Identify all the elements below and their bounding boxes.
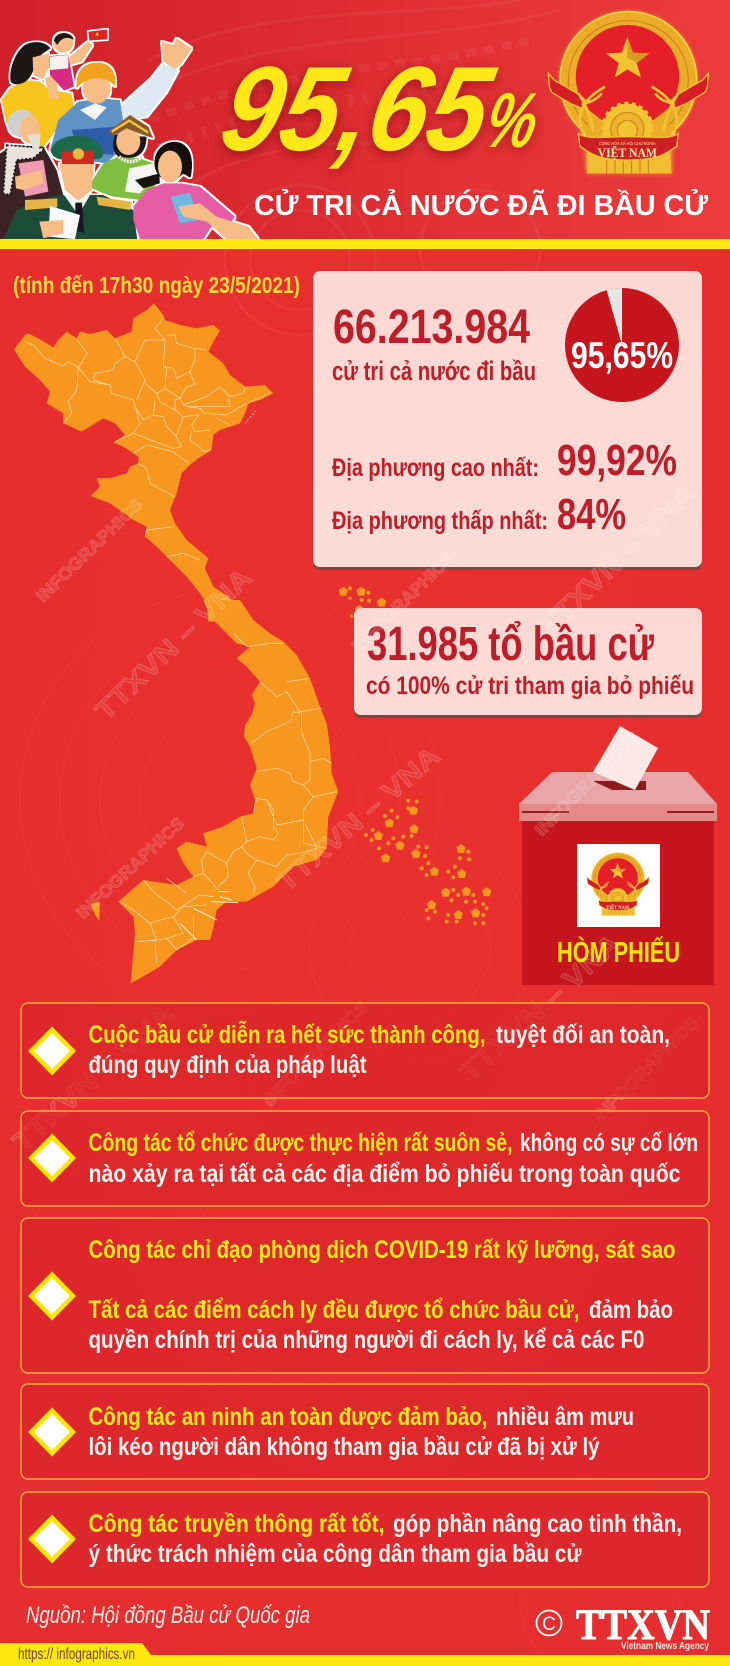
watermarks: TTXVN – VNA	[454, 928, 626, 1087]
panel: election success	[21, 1003, 709, 1098]
emblem on ballot box: VIỆT NAM	[606, 905, 629, 911]
icon: ballot box	[519, 726, 717, 985]
map of Vietnam	[14, 303, 491, 983]
worker with raised hand	[50, 38, 192, 163]
mother	[2, 42, 75, 148]
total voters label: cử tri cả nước đi bầu	[332, 356, 536, 386]
emblem: Vietnam national coat of arms	[548, 12, 708, 173]
statement text	[88, 1403, 634, 1461]
bottom band with website tab: https:// infographics.vn	[18, 1646, 135, 1663]
statement text: lôi kéo người dân không tham gia bầu cử đã bị xử lý	[88, 1433, 600, 1461]
lowest locality value: 84%	[557, 490, 626, 539]
header banner	[0, 0, 730, 335]
title percentage: 95,65	[211, 41, 505, 176]
statement text	[88, 1019, 670, 1079]
panel: communications	[21, 1492, 709, 1587]
copyright logo: TTXVN	[536, 1602, 710, 1652]
panel: organisation	[21, 1111, 709, 1206]
statement text: đảm bảo	[589, 1296, 673, 1324]
soldier	[3, 136, 137, 239]
icon: diamond bullet	[28, 1026, 76, 1076]
Hoang Sa islands	[339, 586, 386, 623]
child with flag	[45, 29, 107, 99]
emblem on ballot box	[587, 853, 649, 916]
island: Phu Quoc	[91, 902, 100, 921]
illustration: voters group	[0, 29, 258, 240]
copyright logo: TTXVN: C	[542, 1614, 556, 1635]
watermarks: INFOGRAPHICS	[259, 997, 372, 1110]
highest locality value: 99,92%	[557, 436, 677, 485]
pie chart 95,65%: 95,65%	[571, 335, 673, 376]
panel: COVID-19 prevention	[21, 1218, 709, 1373]
statement text	[88, 1236, 676, 1354]
woman in pink	[133, 142, 258, 239]
panel: national turnout	[313, 271, 702, 570]
background pattern	[20, 590, 680, 1666]
watermarks: INFOGRAPHICS	[531, 727, 644, 840]
icon: diamond bullet	[28, 1272, 76, 1320]
title percentage: %	[478, 77, 547, 164]
date note: (tính đến 17h30 ngày 23/5/2021)	[13, 272, 300, 298]
statement text: ý thức trách nhiệm của công dân tham gia bầu cử	[88, 1540, 582, 1568]
ethnic woman	[88, 115, 160, 200]
statement text: nhiều âm mưu	[496, 1403, 634, 1431]
copyright logo: TTXVN: Vietnam News Agency	[621, 1641, 709, 1652]
watermarks: INFOGRAPHICS	[589, 1013, 702, 1126]
map: southern provinces	[91, 600, 338, 983]
elderly man	[0, 109, 63, 240]
icon: diamond bullet	[28, 1408, 76, 1456]
watermarks	[7, 477, 702, 1157]
icon: diamond bullet	[28, 1514, 76, 1564]
watermarks: INFOGRAPHICS	[348, 548, 458, 656]
panel: polling groups	[354, 608, 702, 718]
statement text: Công tác an ninh an toàn được đảm bảo,	[88, 1403, 488, 1431]
map: northern and central provinces	[14, 303, 273, 622]
panel: security	[21, 1384, 709, 1479]
statement text: tuyệt đối an toàn,	[496, 1021, 670, 1049]
watermarks: TTXVN – VNA	[533, 477, 702, 641]
lowest locality label: Địa phương thấp nhất:	[332, 507, 548, 535]
statement text: Công tác truyền thông rất tốt,	[88, 1510, 384, 1538]
statement text: đúng quy định của pháp luật	[88, 1051, 367, 1079]
divider band	[0, 239, 730, 249]
statement text: Công tác tổ chức được thực hiện rất suôn sẻ,	[88, 1129, 512, 1157]
statement text: Cuộc bầu cử diễn ra hết sức thành công,	[88, 1019, 486, 1049]
watermarks: TTXVN – VNA	[271, 740, 446, 898]
ballot box label: HÒM PHIẾU	[557, 935, 680, 969]
source note: Nguồn: Hội đồng Bầu cử Quốc gia	[26, 1602, 310, 1629]
watermarks: INFOGRAPHICS	[33, 495, 146, 606]
Truong Sa islands	[364, 799, 491, 925]
subtitle: CỬ TRI CẢ NƯỚC ĐÃ ĐI BẦU CỬ	[254, 188, 709, 222]
emblem: Vietnam national coat of arms: VIỆT NAM	[598, 146, 657, 160]
watermarks: TTXVN – VNA	[89, 562, 258, 726]
watermarks: INFOGRAPHICS	[73, 814, 188, 923]
statement text	[88, 1129, 698, 1188]
statement text	[88, 1510, 682, 1568]
statement text: Tất cả các điểm cách ly đều được tổ chức bầu cử,	[88, 1296, 580, 1324]
total voters number: 66.213.984	[333, 301, 530, 354]
highest locality label: Địa phương cao nhất:	[332, 454, 539, 482]
icon: diamond bullet	[28, 1134, 76, 1182]
watermarks: TTXVN – VNA	[7, 998, 179, 1157]
pie chart 95,65%	[565, 288, 679, 402]
emblem: Vietnam national coat of arms: CỘNG HÒA XÃ HỘI CHỦ NGHĨA	[599, 140, 656, 146]
bottom band with website tab	[0, 1643, 730, 1666]
copyright logo: TTXVN: TTXVN	[576, 1602, 710, 1649]
